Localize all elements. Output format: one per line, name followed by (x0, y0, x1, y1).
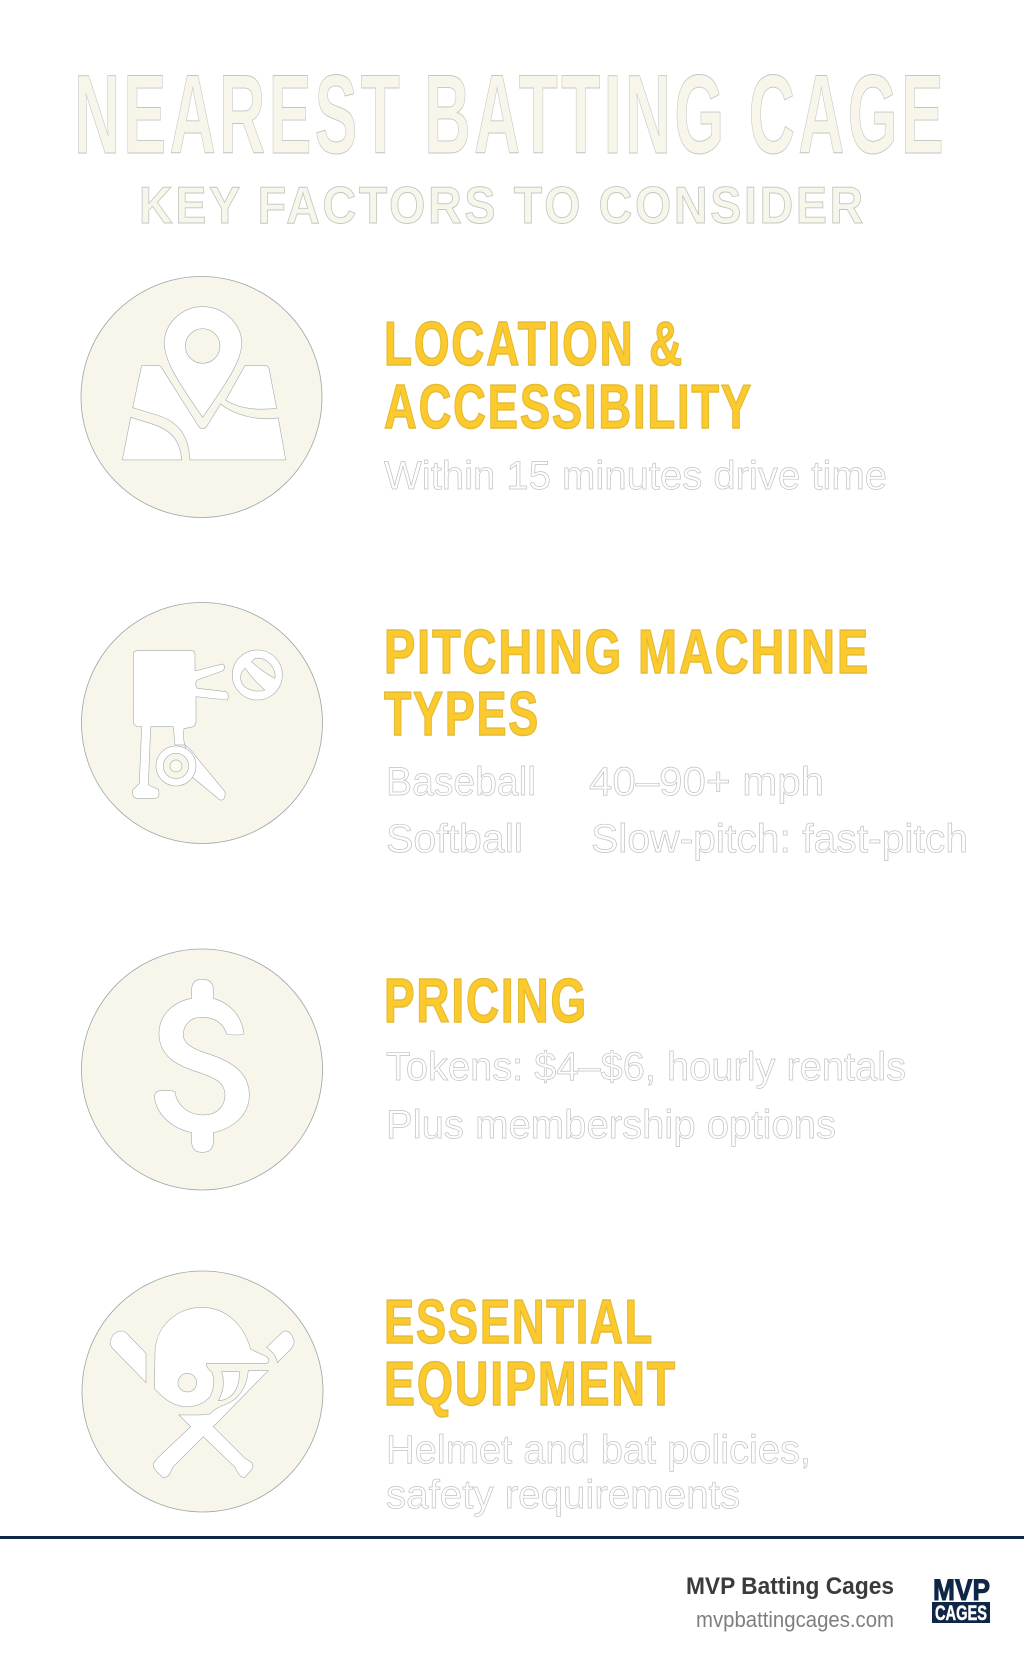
text: baseball speeds: 40–90+ mph (589, 760, 824, 804)
heading: essential equipment: EQUIPMENT (384, 1350, 677, 1419)
icon: helmet and crossed bats (82, 1271, 323, 1512)
subtitle: KEY FACTORS TO CONSIDER (139, 177, 866, 235)
icon: map pin (81, 276, 322, 518)
text: drive time: Within 15 minutes drive time (384, 454, 887, 498)
text: membership: Plus membership options (386, 1103, 836, 1147)
panel: pricing (82, 949, 906, 1190)
icon: pitching machine (82, 602, 322, 844)
heading: location (384, 310, 753, 442)
logo: MVP Cages: MVP (933, 1574, 990, 1607)
heading: pitching machine types: PITCHING MACHINE (384, 618, 870, 687)
heading: location: ACCESSIBILITY (384, 373, 753, 442)
icon: dollar sign (82, 949, 322, 1190)
text: softball speeds: Softball (386, 817, 523, 861)
footer brand text (686, 1573, 894, 1632)
panel: pitching machine types (82, 602, 968, 861)
heading: pitching machine types (384, 618, 870, 749)
heading: essential equipment (384, 1288, 677, 1419)
text: softball speeds: Slow-pitch: fast-pitch (591, 817, 968, 861)
heading: location: LOCATION & (384, 310, 684, 379)
text: tokens: Tokens: $4–$6, hourly rentals (386, 1045, 906, 1089)
footer brand text: mvpbattingcages.com (696, 1607, 894, 1632)
footer brand text: MVP Batting Cages (686, 1573, 894, 1600)
text: softball speeds (386, 817, 968, 861)
heading: essential equipment: ESSENTIAL (384, 1288, 654, 1357)
logo: MVP Cages: CAGES (935, 1602, 987, 1625)
heading: pricing: PRICING (384, 967, 588, 1036)
text: helmet and bat policies (386, 1428, 811, 1517)
text: baseball speeds (386, 760, 824, 804)
logo: MVP Cages (932, 1574, 990, 1625)
panel: location and accessibility (81, 276, 887, 518)
heading: pitching machine types: TYPES (384, 680, 540, 749)
text: helmet and bat policies: Helmet and bat policies, (386, 1428, 811, 1472)
text: baseball speeds: Baseball (386, 760, 536, 804)
footer divider (0, 1536, 1024, 1539)
text: helmet and bat policies: safety requirements (386, 1473, 740, 1517)
panel: essential equipment (82, 1271, 811, 1517)
